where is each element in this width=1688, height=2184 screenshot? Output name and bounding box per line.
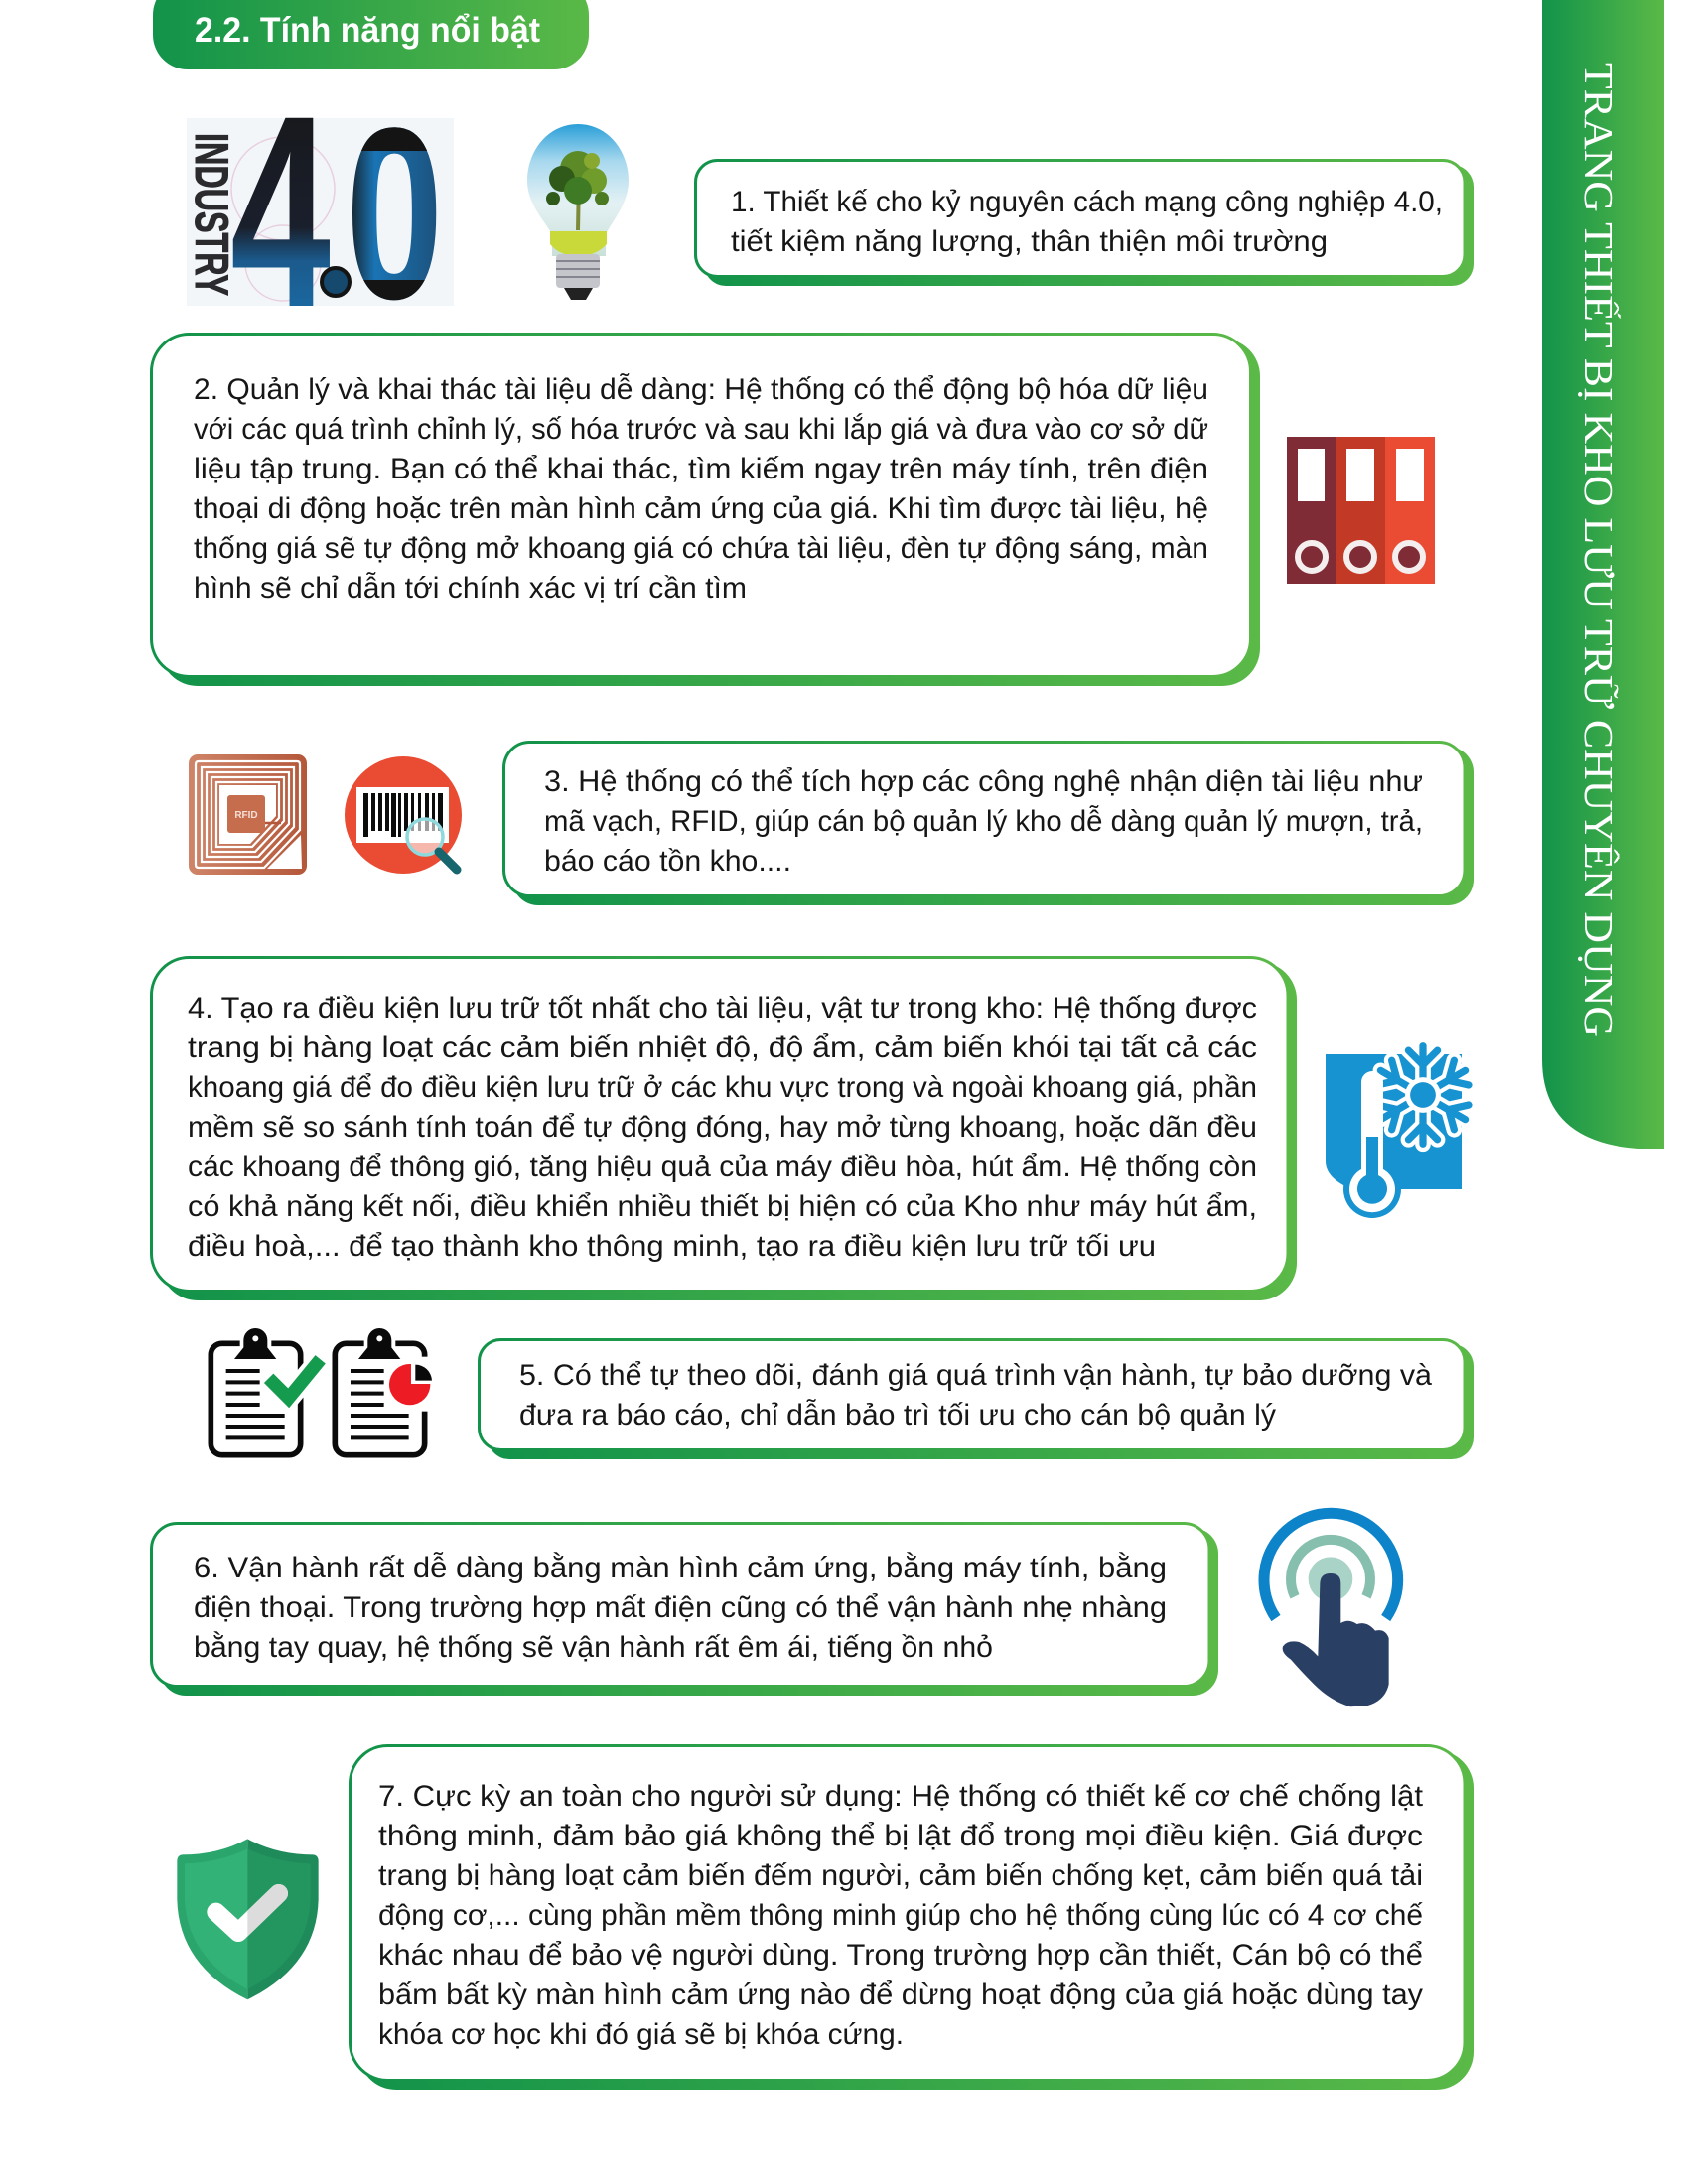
heading text: 2.2. Tính năng nổi bật	[195, 11, 540, 50]
icon: RFID tag: RFID	[234, 810, 258, 821]
card text: 2. Quản lý và khai thác tài liệu dễ dàng: Hệ thống có thể động bộ hóa dữ liệu	[194, 373, 1208, 406]
card shape	[151, 1523, 1218, 1696]
card text: có khả năng kết nối, điều khiển nhiều thiết bị hiện có của Kho như máy hút ẩm,	[188, 1190, 1257, 1223]
card shape	[350, 1745, 1474, 2090]
card text: thông minh, đảm bảo giá không thể bị lật đổ trong mọi điều kiện. Giá được	[378, 1820, 1423, 1852]
card shape	[479, 1340, 1474, 1459]
panel: feature 7	[350, 1745, 1474, 2090]
card text	[378, 1780, 1424, 2051]
card text: mềm sẽ so sánh tính toán để tự động đóng, hay mở từng khoang, hoặc dãn đều	[188, 1111, 1257, 1144]
icon: thermometer and snowflake	[1326, 1046, 1469, 1218]
card text: động cơ,... cùng phần mềm thông minh giúp cho hệ thống cùng lúc có 4 cơ chế	[378, 1899, 1423, 1932]
icon: clipboard with check	[211, 1328, 321, 1455]
card shape	[504, 743, 1474, 905]
card text: bấm bất kỳ màn hình cảm ứng nào để dừng hoạt động của giá hoặc dùng tay	[378, 1979, 1423, 2011]
card text	[731, 186, 1443, 258]
card text: hình sẽ chỉ dẫn tới chính xác vị trí cần tìm	[194, 572, 747, 605]
card text: khóa cơ học khi đó giá sẽ bị khóa cứng.	[378, 2018, 904, 2051]
panel: feature 2	[151, 334, 1260, 686]
card shape	[695, 161, 1474, 286]
card text: 4. Tạo ra điều kiện lưu trữ tốt nhất cho tài liệu, vật tư trong kho: Hệ thống được	[188, 992, 1257, 1024]
icon: barcode scanner	[345, 756, 462, 874]
card text: 5. Có thể tự theo dõi, đánh giá quá trình vận hành, tự bảo dưỡng và	[519, 1359, 1432, 1392]
card text: thống giá sẽ tự động mở khoang giá có chứa tài liệu, đèn tự động sáng, màn	[194, 532, 1208, 565]
icon: light bulb with tree	[527, 124, 629, 300]
card text	[188, 992, 1257, 1263]
icon: industry 4.0: 0	[346, 77, 444, 350]
icon: industry 4.0: INDUSTRY	[186, 133, 238, 296]
card text	[544, 765, 1423, 878]
card text: các khoang để thông gió, tăng hiệu quả của máy điều hòa, hút ẩm. Hệ thống còn	[188, 1151, 1257, 1183]
card text: khoang giá để đo điều kiện lưu trữ ở các khu vực trong và ngoài khoang giá, phần	[188, 1071, 1257, 1104]
card text: bằng tay quay, hệ thống sẽ vận hành rất êm ái, tiếng ồn nhỏ	[194, 1631, 993, 1664]
panel: feature 1	[695, 161, 1474, 286]
card text: liệu tập trung. Bạn có thể khai thác, tìm kiếm ngay trên máy tính, trên điện	[194, 453, 1208, 485]
panel: feature 5	[479, 1340, 1474, 1459]
icon: clipboard with pie chart	[335, 1328, 434, 1455]
card text: 3. Hệ thống có thể tích hợp các công nghệ nhận diện tài liệu như	[544, 765, 1423, 798]
card text: trang bị hàng loạt cảm biến đếm người, cảm biến chống kẹt, cảm biến quá tải	[378, 1859, 1423, 1892]
card text: thoại di động hoặc trên màn hình cảm ứng của giá. Khi tìm được tài liệu, hệ	[194, 492, 1208, 525]
icon: binders	[1287, 437, 1435, 584]
panel: feature 3	[504, 743, 1474, 905]
icon: industry 4.0: 0	[346, 77, 444, 350]
icon: RFID tag	[189, 754, 307, 875]
side banner	[1542, 0, 1664, 1149]
card text: tiết kiệm năng lượng, thân thiện môi trường	[731, 225, 1328, 258]
card text	[519, 1359, 1432, 1432]
panel: feature 4	[151, 957, 1297, 1300]
icon: industry 4.0: 4	[230, 60, 331, 364]
card text: 6. Vận hành rất dễ dàng bằng màn hình cảm ứng, bằng máy tính, bằng	[194, 1552, 1167, 1584]
card shape	[151, 957, 1297, 1300]
card text: báo cáo tồn kho....	[544, 845, 791, 878]
card text	[194, 1552, 1167, 1664]
card text: trang bị hàng loạt các cảm biến nhiệt độ, độ ẩm, cảm biến khói tại tất cả các	[188, 1031, 1257, 1064]
card text: khác nhau để bảo vệ người dùng. Trong trường hợp cần thiết, Cán bộ có thể	[378, 1939, 1423, 1972]
icon: industry 4.0	[187, 117, 454, 306]
banner title: TRANG THIẾT BỊ KHO LƯU TRỮ CHUYÊN DỤNG	[1576, 63, 1621, 1037]
card text: 1. Thiết kế cho kỷ nguyên cách mạng công nghiệp 4.0,	[731, 186, 1443, 218]
heading pill	[153, 0, 589, 69]
icon: touch hand	[1264, 1513, 1398, 1706]
card text: đưa ra báo cáo, chỉ dẫn bảo trì tối ưu cho cán bộ quản lý	[519, 1399, 1276, 1432]
icon: shield with check	[177, 1839, 319, 1999]
card text: 7. Cực kỳ an toàn cho người sử dụng: Hệ thống có thiết kế cơ chế chống lật	[378, 1780, 1424, 1813]
card shape	[151, 334, 1260, 686]
card text: điện thoại. Trong trường hợp mất điện cũng có thể vận hành nhẹ nhàng	[194, 1591, 1167, 1624]
card text: điều hoà,... để tạo thành kho thông minh, tạo ra điều kiện lưu trữ tối ưu	[188, 1230, 1156, 1263]
panel: feature 6	[151, 1523, 1218, 1696]
card text	[194, 373, 1208, 605]
card text: mã vạch, RFID, giúp cán bộ quản lý kho dễ dàng quản lý mượn, trả,	[544, 805, 1423, 838]
card text: với các quá trình chỉnh lý, số hóa trước và sau khi lắp giá và đưa vào cơ sở dữ	[194, 413, 1208, 446]
